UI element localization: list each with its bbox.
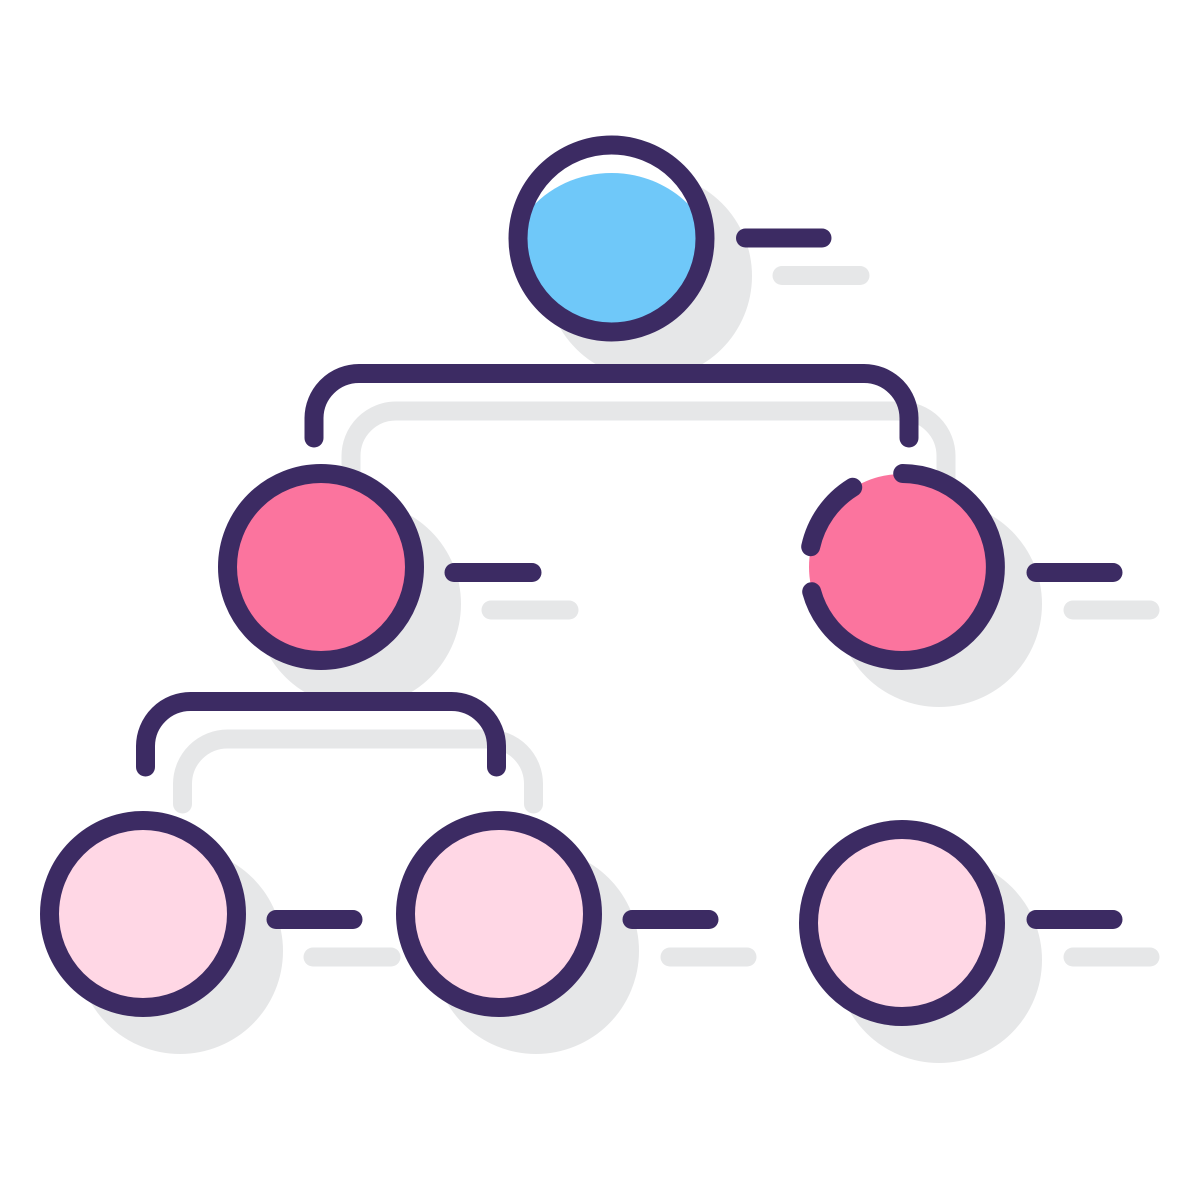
third level node 3: light pink circle bbox=[808, 830, 996, 1016]
third level node 2 label line bbox=[632, 910, 709, 929]
third level node 1 label line bbox=[276, 910, 353, 929]
root node: blue circle bbox=[518, 145, 705, 332]
third level node 3 label line bbox=[1036, 910, 1113, 929]
connector: left node to third level bbox=[146, 702, 496, 767]
connector: root to second level bbox=[314, 374, 909, 438]
second level left node: pink circle bbox=[228, 474, 414, 660]
shadow layer bbox=[77, 173, 1150, 1063]
root node label line bbox=[746, 228, 822, 248]
second level right node: pink circle with broken outline bbox=[809, 474, 995, 660]
third level node 2: light pink circle bbox=[406, 820, 592, 1008]
third level node 1: light pink circle bbox=[50, 820, 236, 1008]
second level left label line bbox=[454, 563, 532, 582]
second level right label line bbox=[1036, 563, 1113, 582]
